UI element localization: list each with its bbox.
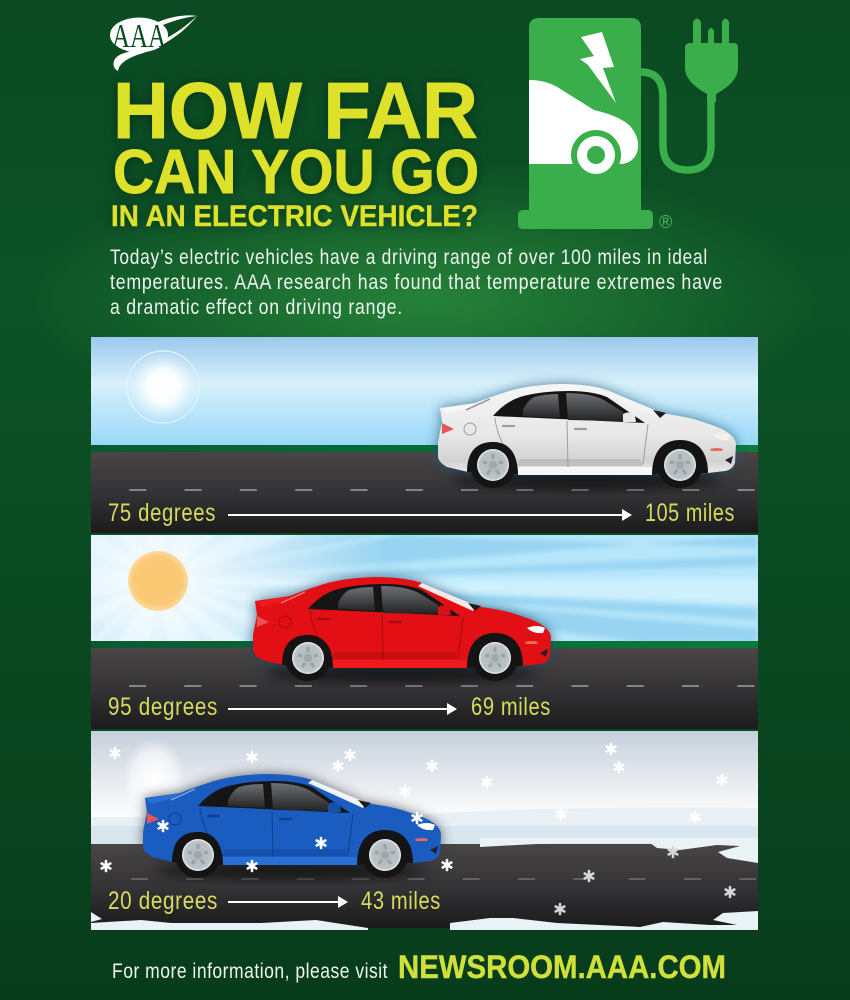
snowflakes xyxy=(102,744,734,914)
title xyxy=(111,66,479,233)
label: 95 degrees to 69 miles: 69 miles xyxy=(471,693,551,721)
snow on road edges xyxy=(91,838,758,930)
icon: winter sun xyxy=(128,742,180,797)
panel: 75 degrees xyxy=(74,337,758,533)
car: red xyxy=(253,577,551,682)
icon: pale sun xyxy=(127,351,199,423)
label: 20 degrees to 43 miles: 20 degrees xyxy=(108,887,218,915)
label: 20 degrees to 43 miles: 43 miles xyxy=(361,887,441,915)
logo: AAA xyxy=(110,15,197,71)
sun rays xyxy=(91,535,758,642)
panel: 20 degrees xyxy=(91,731,758,930)
footer xyxy=(112,949,726,985)
intro text: Today’s electric vehicles have a driving range of over 100 miles in ideal xyxy=(110,246,708,269)
title: CAN YOU GO xyxy=(113,138,479,207)
intro text xyxy=(110,246,723,319)
label: 75 degrees to 105 miles xyxy=(109,503,734,526)
footer: For more information, please visit xyxy=(112,960,388,983)
intro text: a dramatic effect on driving range. xyxy=(110,296,403,319)
label: 20 degrees to 43 miles xyxy=(109,891,440,914)
car: blue xyxy=(143,774,441,879)
title: HOW FAR xyxy=(113,66,478,155)
label: 75 degrees to 105 miles: 75 degrees xyxy=(108,499,216,527)
logo: AAA: AAA xyxy=(112,18,166,55)
intro text: temperatures. AAA research has found that temperature extremes have xyxy=(110,271,723,294)
icon: charging station with plug: ® xyxy=(659,212,672,232)
icon: charging station with plug xyxy=(518,18,738,232)
car: white xyxy=(438,384,736,489)
title: IN AN ELECTRIC VEHICLE? xyxy=(111,200,478,233)
icon: hot sun xyxy=(128,551,188,611)
panel: 95 degrees xyxy=(91,535,758,729)
label: 75 degrees to 105 miles: 105 miles xyxy=(645,499,735,527)
label: 95 degrees to 69 miles xyxy=(109,697,550,720)
footer: NEWSROOM.AAA.COM xyxy=(398,949,726,985)
label: 95 degrees to 69 miles: 95 degrees xyxy=(108,693,218,721)
